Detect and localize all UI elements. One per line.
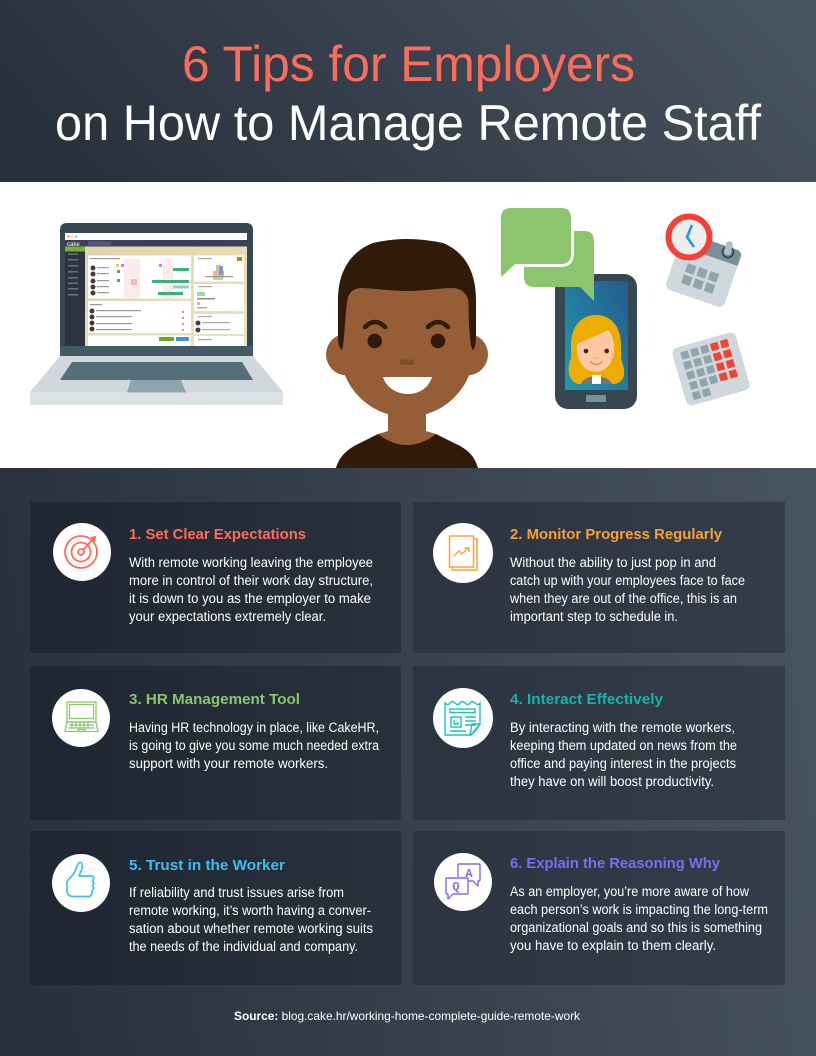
illustration band: [0, 182, 816, 468]
icon: question and answer bubbles: Q: [452, 880, 460, 894]
body text: it is down to you as the employer to make: [129, 591, 371, 606]
tips background band: [0, 468, 816, 1056]
heading: 5. Trust in the Worker: [129, 857, 285, 874]
illustration: phone with video call: [555, 274, 637, 409]
illustration: laptop with HR dashboard: cake: [67, 242, 80, 248]
body text: By interacting with the remote workers,: [510, 720, 735, 735]
body text: your expectations extremely clear.: [129, 609, 326, 624]
body text: the needs of the individual and company.: [129, 939, 358, 954]
illustration: speech bubbles: [501, 208, 594, 301]
panel: tip 1 set clear expectations: [30, 502, 401, 653]
illustration: monthly calendar: [671, 331, 751, 407]
body text: keeping them updated on news from the: [510, 738, 737, 753]
icon: chart document: [433, 523, 493, 583]
icon: target: [53, 523, 111, 581]
body text: office and paying interest in the projects: [510, 756, 736, 771]
body text: is going to give you some much needed extra: [129, 738, 380, 753]
illustration: laptop with HR dashboard: [30, 223, 283, 405]
heading: 3. HR Management Tool: [129, 691, 300, 708]
body text: catch up with your employees face to face: [510, 573, 745, 588]
body text: more in control of their work day structure,: [129, 573, 373, 588]
panel: tip 6 explain the reasoning why: [413, 831, 785, 985]
body text: [509, 555, 745, 624]
body text: If reliability and trust issues arise from: [129, 885, 344, 900]
body text: [129, 555, 373, 624]
body text: remote working, it’s worth having a conver-: [129, 903, 371, 918]
body text: sation about whether remote working suits: [129, 921, 373, 936]
panel: tip 5 trust in the worker: [30, 831, 401, 985]
body text: each person’s work is impacting the long-term: [510, 902, 768, 917]
body text: important step to schedule in.: [510, 609, 678, 624]
illustration: calendar with clock: [664, 216, 743, 308]
heading: 2. Monitor Progress Regularly: [510, 526, 723, 543]
heading: 4. Interact Effectively: [510, 691, 664, 708]
body text: when they are out of the office, this is an: [509, 591, 737, 606]
body text: [129, 720, 380, 771]
panel: tip 3 hr management tool: [30, 666, 401, 820]
body text: [510, 884, 768, 953]
illustration: smiling man: [326, 239, 488, 468]
body text: Having HR technology in place, like CakeHR,: [129, 720, 379, 735]
header band: [0, 0, 816, 182]
icon: question and answer bubbles: A: [465, 867, 473, 881]
title: 6 Tips for Employers: [182, 36, 635, 92]
icon: laptop: [52, 689, 110, 747]
body text: organizational goals and so this is something: [510, 920, 762, 935]
title: on How to Manage Remote Staff: [55, 95, 761, 151]
heading: 6. Explain the Reasoning Why: [510, 855, 721, 872]
source line: Source: blog.cake.hr/working-home-complete-guide-remote-work: [234, 1009, 580, 1023]
body text: they have on will boost productivity.: [510, 774, 714, 789]
icon: newspaper: [433, 688, 493, 748]
body text: support with your remote workers.: [129, 756, 328, 771]
body text: As an employer, you’re more aware of how: [510, 884, 749, 899]
body text: With remote working leaving the employee: [129, 555, 373, 570]
heading: 1. Set Clear Expectations: [129, 526, 306, 543]
title: [55, 36, 761, 151]
icon: question and answer bubbles: [434, 853, 492, 911]
panel: tip 4 interact effectively: [413, 666, 785, 820]
body text: you have to explain to them clearly.: [510, 938, 716, 953]
body text: [129, 885, 373, 954]
panel: tip 2 monitor progress regularly: [413, 502, 785, 653]
body text: Without the ability to just pop in and: [510, 555, 716, 570]
body text: [510, 720, 737, 789]
icon: thumbs up: [52, 854, 110, 912]
